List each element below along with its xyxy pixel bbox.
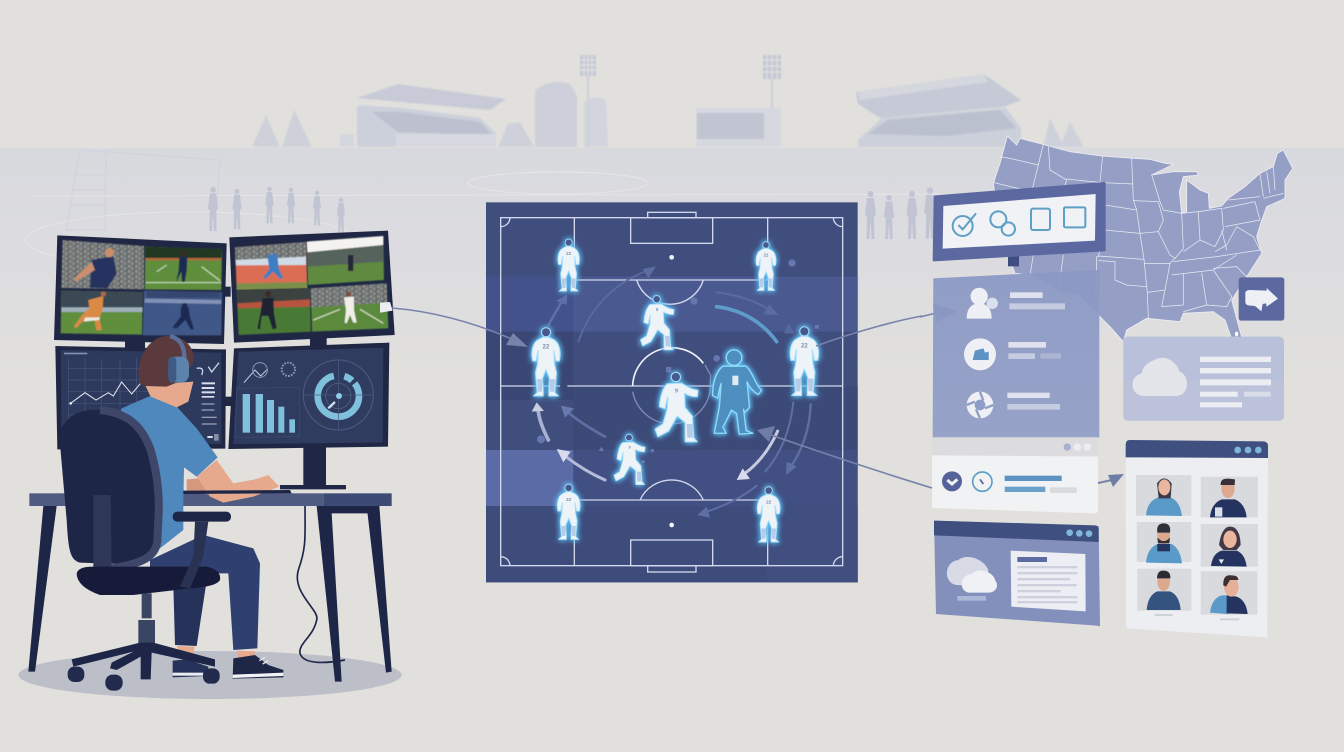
player: top-right defender: [756, 242, 776, 290]
text lines: [1200, 357, 1271, 407]
icon: cloud: [1132, 358, 1187, 396]
icon: tablet: [1031, 209, 1050, 230]
portrait: woman in light kit: [1136, 475, 1191, 516]
video: white kit player: [311, 283, 388, 332]
capture tab: [380, 302, 393, 313]
arrow: [532, 402, 548, 440]
desk legs: [28, 506, 392, 682]
monitor: line chart dashboard: [55, 346, 226, 449]
arrow badge: [1239, 277, 1284, 321]
progress bars: [1005, 476, 1077, 493]
row: aperture icon: [967, 392, 1060, 418]
player: forward midfielder: [640, 296, 674, 350]
player: bottom-left defender: [557, 484, 580, 539]
portrait: man with glasses: [1137, 569, 1191, 611]
tactical markers: [537, 259, 819, 463]
video: tactical clip: [143, 291, 222, 335]
arrow: [765, 402, 793, 472]
desk top: [29, 493, 392, 506]
monitor: top-left video grid: [54, 235, 227, 344]
icon: clouds: [947, 557, 997, 601]
scoreboard: [696, 108, 781, 147]
chair seat: [77, 567, 220, 595]
video: distant player: [307, 236, 384, 285]
icon: check badge: [942, 471, 962, 491]
hair: [139, 336, 193, 387]
trousers: [150, 535, 260, 650]
video: goalkeeper: [237, 288, 311, 335]
connector arrow: status card to team: [1098, 474, 1124, 487]
central tactical pitch board: [486, 202, 858, 582]
status card: [932, 437, 1098, 513]
desk scene: [18, 231, 402, 699]
bar chart: [235, 387, 299, 437]
portrait: man in split kit: [1201, 571, 1257, 615]
pitch lines: [501, 212, 843, 572]
player: central runner: [655, 372, 698, 442]
movement arrows: [532, 266, 811, 518]
chair back: [59, 410, 162, 564]
faint pitch markings: [25, 172, 1000, 268]
shirt: [103, 396, 218, 553]
near arm: [197, 460, 279, 503]
team roster window: [1126, 440, 1268, 637]
neck: [145, 382, 193, 407]
icon: window: [1064, 207, 1085, 227]
document: [1011, 551, 1086, 611]
faint goal: [66, 149, 220, 230]
radial donut chart: [303, 360, 373, 430]
arrow: [717, 292, 778, 315]
profile list panel: [933, 270, 1099, 437]
player: top-left defender: [558, 239, 579, 291]
arrow: [697, 486, 757, 518]
headset: [168, 336, 189, 383]
video: pitch player: [145, 247, 222, 290]
player: right wing: [790, 327, 819, 396]
far arm: [187, 478, 220, 497]
cloud storage panel: [1123, 337, 1284, 421]
arrow: [561, 406, 605, 437]
connector arrow: status card to pitch: [757, 426, 932, 488]
connector arrow: video wall to pitch: [392, 308, 528, 347]
player: lower runner: [614, 434, 645, 485]
portrait: woman in navy: [1201, 524, 1258, 567]
silhouette players right: [865, 187, 936, 239]
player: bottom-right defender: [757, 487, 780, 542]
chair base: [68, 643, 220, 691]
cloud document window: [934, 521, 1100, 626]
city towers: [535, 82, 608, 147]
chair spine: [93, 495, 117, 593]
connector arrow: pitch to profile panel: [816, 304, 958, 346]
small gauges: [244, 363, 295, 383]
armrest: [173, 512, 231, 588]
video: orange runner: [61, 291, 143, 335]
floodlights: [580, 55, 781, 148]
arrow: highlighted run: [717, 307, 777, 342]
person: [59, 336, 292, 691]
portrait: bearded man: [1137, 522, 1191, 563]
ankle: [177, 646, 255, 661]
shoes: [173, 655, 283, 679]
monitor stand: [125, 287, 346, 489]
floor shadow: [18, 651, 402, 699]
portrait: man in navy kit: [1201, 477, 1258, 517]
shaded turf bands: [486, 277, 858, 582]
icon: clock: [973, 472, 992, 491]
monitor: analytics dashboard: [228, 343, 389, 449]
arrow: [578, 266, 656, 342]
row: user idea: [967, 288, 1065, 319]
arrow: [737, 431, 778, 480]
stadium skyline: [252, 55, 1084, 148]
trees: [252, 110, 1084, 147]
icon: linked circles: [990, 211, 1015, 236]
video: sprinter on track: [235, 242, 307, 290]
chair column: [138, 593, 155, 643]
video: close-up player: [61, 240, 144, 289]
cable: [297, 503, 345, 662]
right grandstand: [856, 74, 1021, 147]
arrow: [548, 294, 567, 325]
player: highlighted blue player: [713, 350, 762, 434]
keyboard: [183, 490, 292, 494]
row: team badge: [964, 338, 1061, 370]
arrow: [786, 404, 811, 475]
left grandstand: [357, 84, 506, 147]
silhouette players left: [208, 187, 345, 232]
chair trim: [100, 410, 159, 568]
map of the United States: [993, 136, 1293, 348]
icon: check circle: [953, 213, 976, 236]
player: left wing: [532, 328, 560, 396]
monitor: top-right video grid: [229, 231, 395, 343]
arrow: [557, 449, 605, 480]
toolbar panel: [934, 183, 1104, 266]
